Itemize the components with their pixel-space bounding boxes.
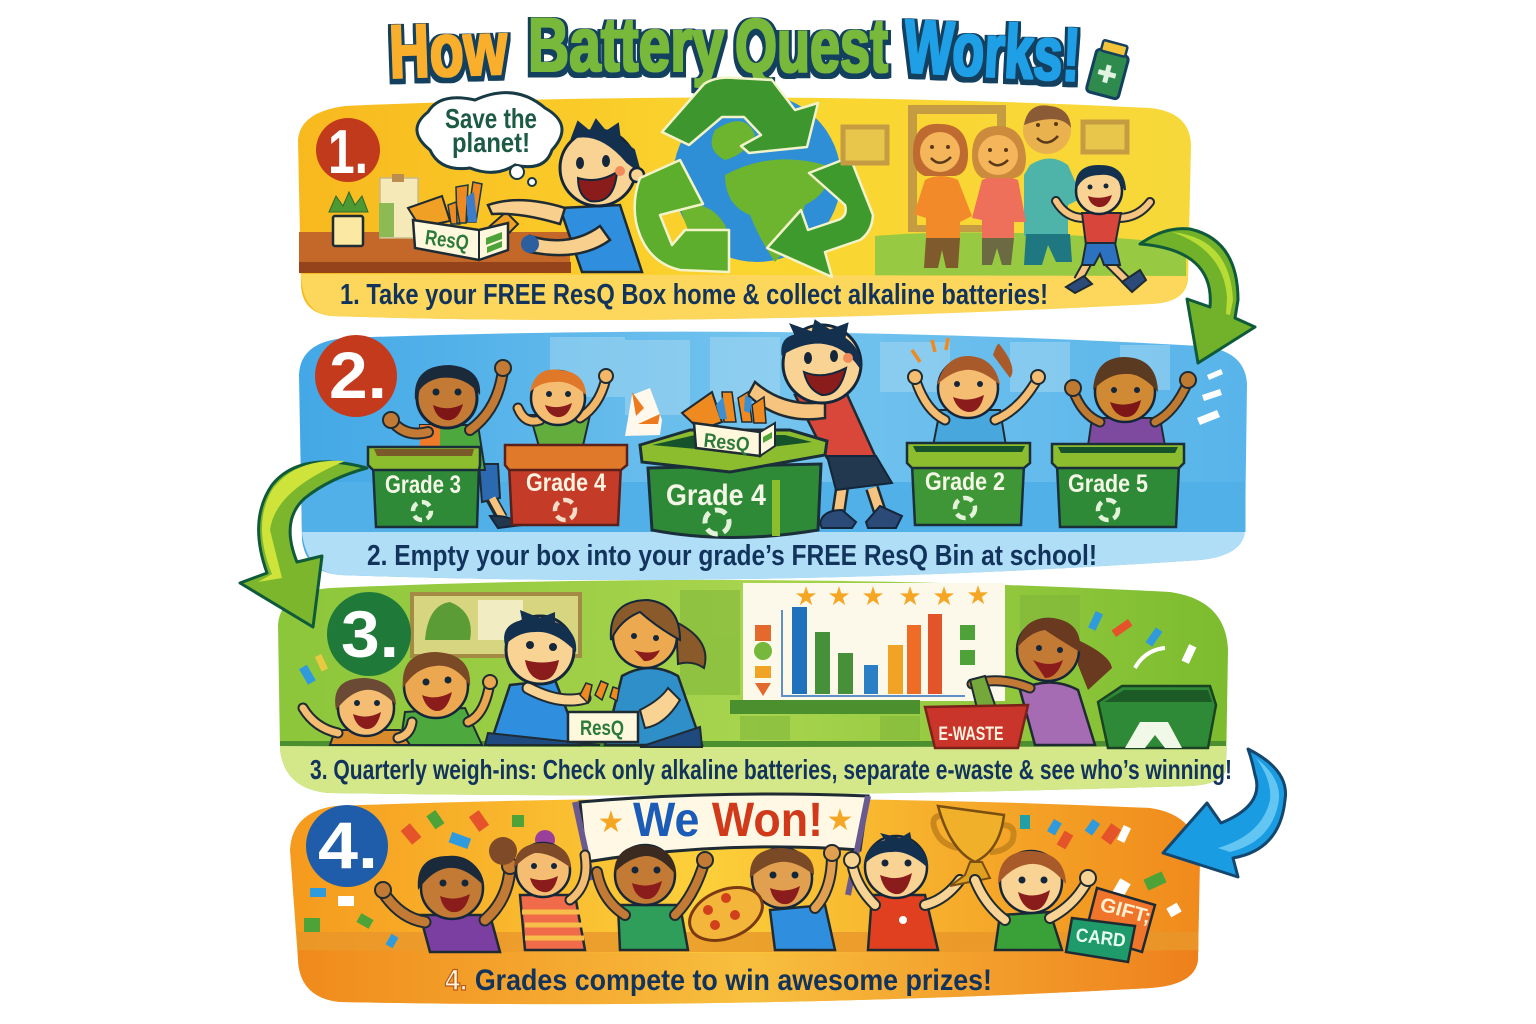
ResQ box [682,392,775,456]
chart board [730,580,1005,714]
bin: Grade 4 large with ResQ box [640,392,827,538]
stars: ★ [827,581,851,611]
kid 6 green [975,851,1096,950]
ResQ box: ResQ [703,430,751,456]
kid 1 purple [375,856,518,952]
kid 3 green shirt [597,845,713,950]
kid behind Grade 2 bin [908,338,1045,446]
confetti [299,611,1196,685]
title: Quest [735,4,888,89]
green shirt kid [400,652,497,745]
bin: recycling [1098,686,1216,748]
panel 4 background [290,798,1200,1004]
wall poster [412,594,580,656]
stars: ★ [794,581,818,611]
number badge 2: 2. [329,338,387,412]
title: How [388,6,509,95]
boy and teacher sorting [485,600,705,747]
panel: step 2 [299,320,1247,580]
banner: We Won!: We Won! [633,794,823,847]
ResQ box with batteries: ResQ [424,226,470,255]
floor [301,482,1246,532]
bin: Grade 4 large with ResQ box: Grade 4 [666,479,766,512]
number badge 4: 4. [318,808,378,882]
title: Battery [528,3,724,88]
boy emptying box [748,320,902,528]
confetti [1197,369,1223,425]
number badge 3 [327,592,411,676]
bin: Grade 2 [907,443,1030,525]
caption 4: 4. Grades compete to win awesome prizes! [445,964,992,997]
woman 2 [972,126,1026,265]
orange shirt kid [303,678,412,745]
arrow: step 2 to 3 [240,461,367,627]
batteries and ResQ box [568,681,680,742]
paper shreds [625,388,662,436]
floor strip [297,932,1198,952]
panel: step 1 [298,78,1191,320]
boy with box [488,120,644,272]
banner: We Won!: ★ [598,806,624,839]
kid 4 blue [750,845,840,950]
number badge 2 [315,335,397,417]
title: Works! [902,4,1082,98]
floor line [280,741,1226,748]
stars: ★ [966,580,990,610]
stars: ★ [861,581,885,611]
caption 2: 2. Empty your box into your grade’s FREE ResQ Bin at school! [367,540,1097,572]
kid behind Grade 5 bin [1065,357,1196,446]
caption 1: 1. Take your FREE ResQ Box home & collect alkaline batteries! [340,279,1048,311]
panel: step 3 [278,580,1232,795]
banner: We Won!: ★ [827,804,853,837]
stars [794,580,990,611]
caption band [301,274,1188,320]
bin: Grade 4 red [505,445,627,525]
bin: Grade 5: Grade 5 [1068,470,1148,498]
bin: Grade 4 red: Grade 4 [526,469,606,497]
bin: Grade 2: Grade 2 [925,468,1005,496]
caption band [280,746,1226,795]
gift card: GIFT; [1098,894,1154,929]
kid behind Grade 4 red bin [518,369,613,450]
chart side legend [754,625,975,696]
arrow: step 3 to 4 [1163,749,1286,877]
bin: e-waste [925,676,1028,748]
desk [299,232,570,266]
title [388,3,1082,98]
family [913,105,1150,293]
caption band [298,950,1198,1004]
bin: Grade 3 [368,447,480,527]
batteries and ResQ box: ResQ [580,717,624,740]
icon: earth globe [673,94,841,262]
kid behind Grade 3 bin [383,360,522,528]
panel 3 background [278,580,1228,795]
thought bubble [417,93,562,186]
child waving [1056,166,1150,293]
bin: e-waste: E-WASTE [938,724,1004,745]
picture frame door [908,105,1006,232]
icon: recycling arrows [635,78,873,277]
number badge 1: 1. [328,118,368,187]
icon: plant [329,192,368,246]
panel 2 background [299,332,1247,580]
thought bubble: planet! [452,127,530,158]
number badge 3: 3. [341,597,399,671]
panel: step 4 [290,794,1200,1004]
bin: Grade 3: Grade 3 [385,471,461,499]
kid 5 red [844,832,960,950]
two kids on left [303,652,497,745]
number badge 4 [306,805,388,887]
girl with e-waste [972,618,1112,745]
ResQ box with batteries [408,182,518,260]
wall pictures [843,122,1127,163]
gift card: CARD [1075,925,1127,952]
kid 2 striped [489,830,586,950]
stars: ★ [932,581,956,611]
stars: ★ [898,581,922,611]
bar chart [782,607,965,696]
windows in background [550,337,1170,415]
banner: We Won! [575,794,868,895]
clipboard [379,174,418,238]
caption 3: 3. Quarterly weigh-ins: Check only alkaline batteries, separate e-waste & see who’s winning! [310,754,1232,785]
wall patches [680,590,1080,740]
woman 1 [913,124,972,268]
man [1023,105,1082,265]
teacher [605,600,705,747]
caption band [302,532,1245,580]
confetti [304,810,1182,948]
boy [485,610,600,745]
floor [875,232,1186,280]
arrow: step 1 to 2 [1140,229,1255,363]
icon: trophy [933,806,1014,886]
gift card [1066,888,1155,962]
bin: Grade 5 [1052,444,1184,527]
icon: battery [1086,39,1132,100]
thought bubble: Save the [445,103,537,134]
icon: pizza [682,878,770,950]
panel 1 background [298,97,1191,320]
